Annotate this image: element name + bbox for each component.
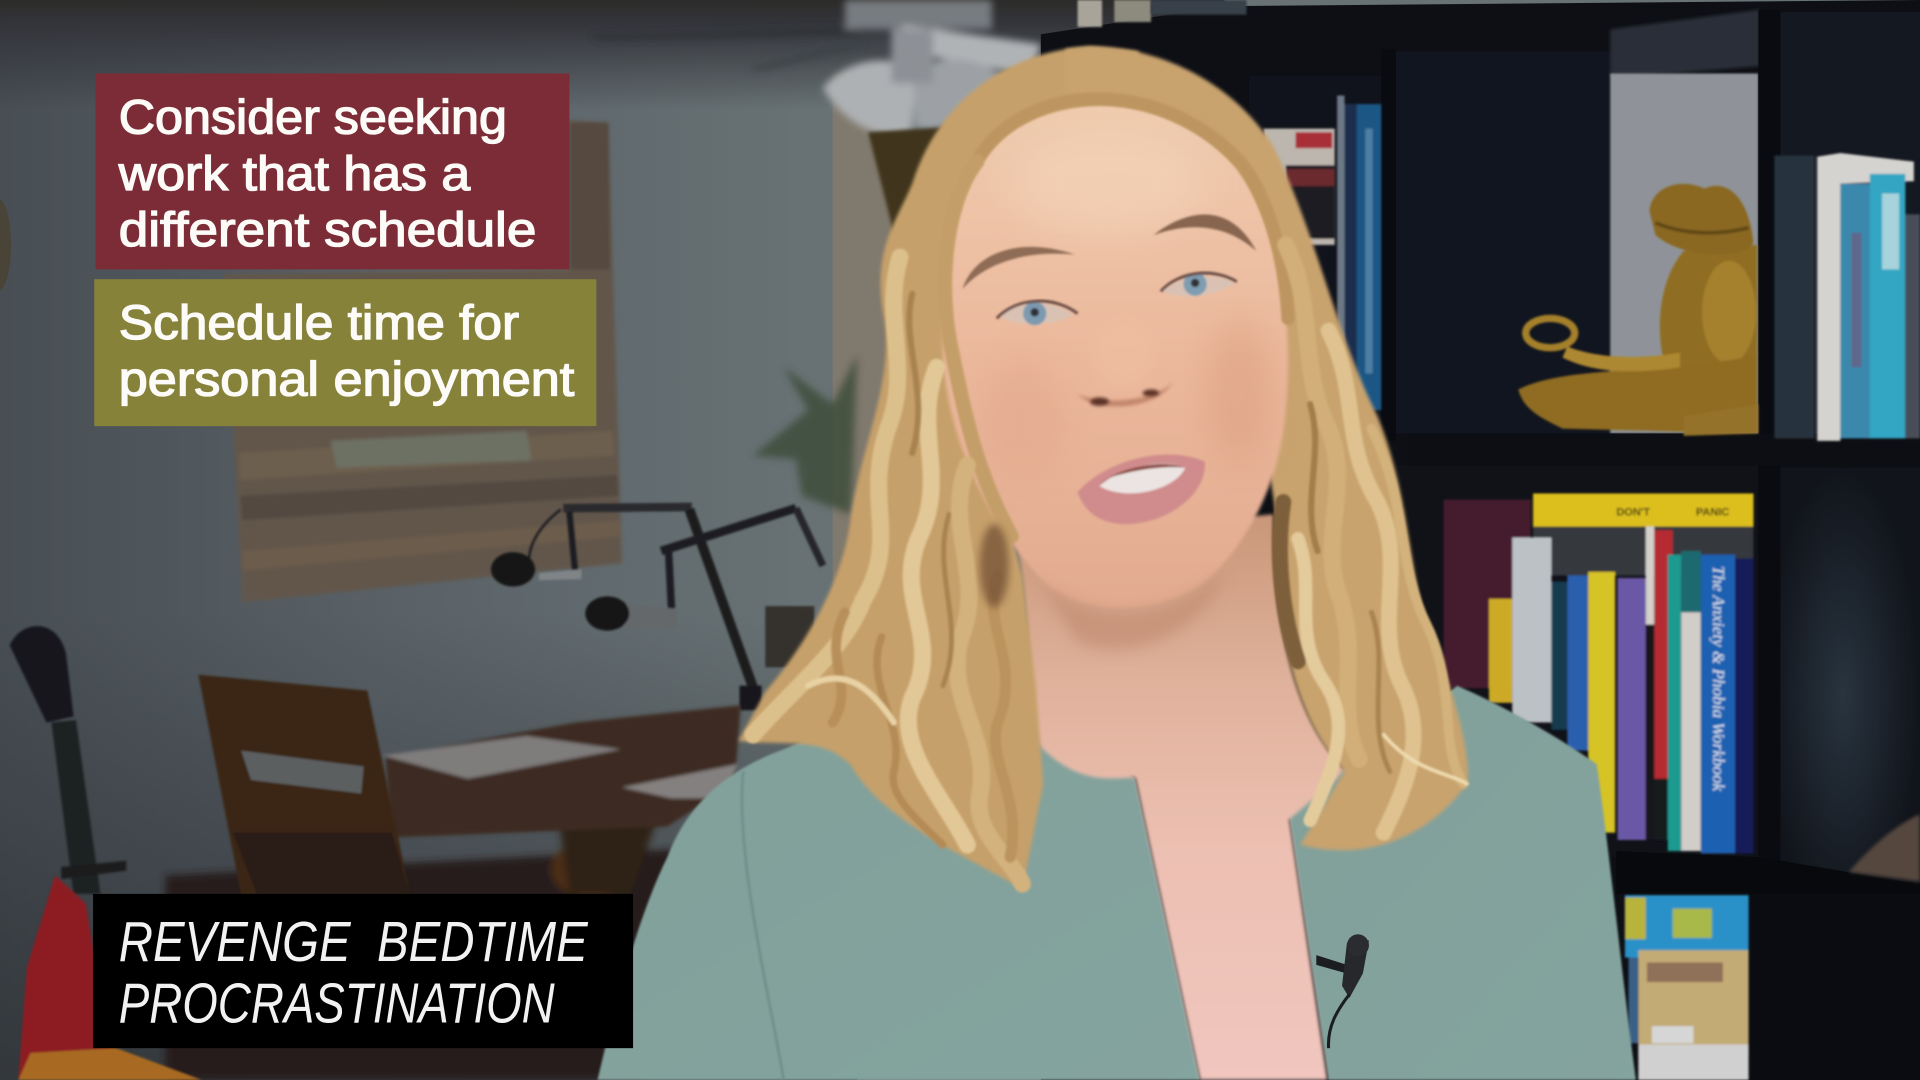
brass frog statue bbox=[1518, 184, 1758, 436]
jacket right side bbox=[1280, 686, 1636, 1080]
left cheek shading bbox=[978, 355, 1067, 478]
forehead highlight bbox=[1010, 132, 1206, 235]
desk microphones and boom arms bbox=[491, 507, 823, 710]
right eye bbox=[1161, 272, 1237, 297]
right cheek shading bbox=[1205, 318, 1273, 465]
books behind hair on top shelf bbox=[1264, 96, 1381, 410]
left eye bbox=[997, 301, 1078, 325]
wooden chair bbox=[198, 675, 410, 895]
callout: consider seeking different work: work that has a bbox=[118, 148, 471, 201]
books on top right shelf bbox=[1774, 153, 1920, 441]
jacket seam bbox=[742, 771, 784, 1080]
woven wall hanging bbox=[223, 120, 622, 602]
books on middle shelf: DON'T bbox=[1616, 507, 1650, 519]
callout: schedule personal time: personal enjoyment bbox=[119, 354, 574, 407]
books on middle shelf: PANIC bbox=[1696, 507, 1729, 519]
rock on right shelf bbox=[1849, 814, 1920, 882]
callout: schedule personal time: Schedule time for bbox=[119, 297, 519, 350]
nose bbox=[1078, 318, 1173, 407]
callout: consider seeking different work bbox=[96, 73, 569, 269]
chin underside shadow bbox=[1035, 569, 1224, 650]
lavalier microphone bbox=[1316, 934, 1369, 1048]
title box: revenge bedtime procrastination bbox=[93, 894, 633, 1048]
callout: consider seeking different work: Consider seeking bbox=[119, 91, 507, 144]
callout: consider seeking different work: different schedule bbox=[119, 204, 536, 257]
title box: revenge bedtime procrastination: REVENGE BEDTIME bbox=[119, 910, 589, 973]
jacket left side bbox=[598, 716, 1200, 1080]
wall clock edge bbox=[0, 198, 11, 291]
books on middle shelf: The Anxiety & Phobia Workbook bbox=[1709, 566, 1728, 792]
mouth bbox=[1078, 455, 1205, 524]
title box: revenge bedtime procrastination: PROCRASTINATION bbox=[119, 971, 555, 1034]
boxes on lower shelf bbox=[1625, 895, 1749, 1080]
right eyebrow bbox=[1153, 214, 1256, 251]
neck and chest bbox=[1016, 514, 1344, 1080]
wooden column bbox=[868, 127, 945, 257]
callout: schedule personal time bbox=[94, 279, 596, 426]
hair strands bbox=[753, 99, 1467, 884]
floor and under-table shadow bbox=[165, 808, 759, 1080]
shadow beside neck under hair bbox=[980, 524, 1009, 607]
electric guitar bbox=[10, 626, 202, 1080]
presenter bbox=[598, 47, 1636, 1080]
hair: left mass bbox=[738, 47, 1139, 889]
left eyebrow bbox=[962, 247, 1075, 289]
hair: right mass bbox=[1065, 47, 1468, 850]
dining table bbox=[382, 705, 741, 838]
ceiling fan bbox=[590, 0, 1041, 134]
face bbox=[943, 105, 1288, 608]
plant bbox=[753, 355, 857, 514]
books on middle shelf bbox=[1444, 493, 1753, 853]
bookcase frame and back bbox=[1041, 0, 1920, 1080]
